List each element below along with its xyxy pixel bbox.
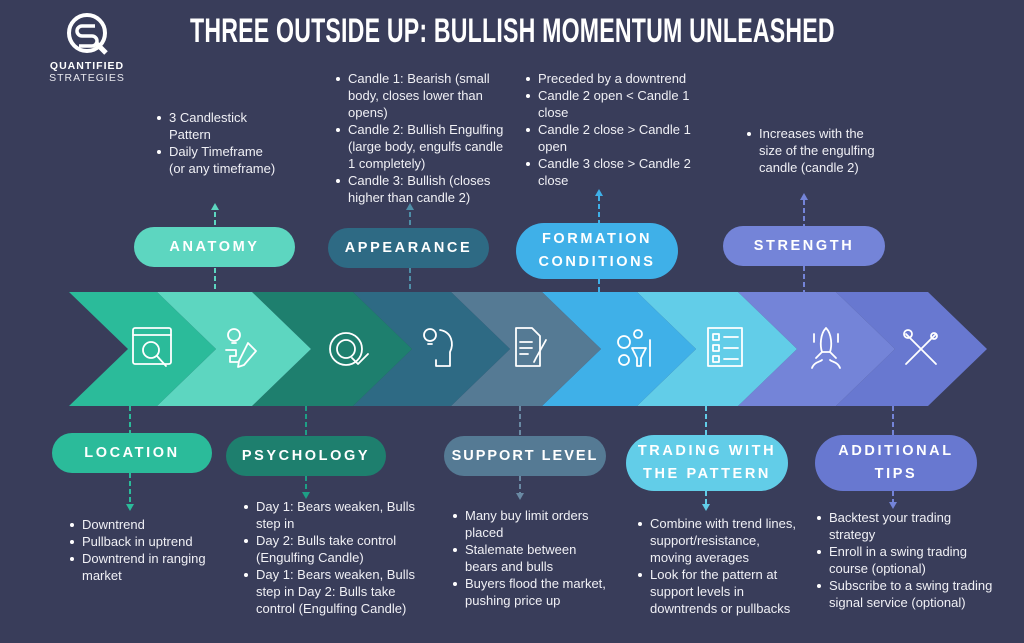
- text: appearance: [336, 71, 503, 205]
- text: support level: Buyers flood the market, pushing price up: [465, 576, 606, 608]
- pill: strength: [723, 226, 885, 266]
- logo: STRATEGIES: [49, 72, 125, 84]
- text: additional tips: Backtest your trading strategy: [829, 510, 951, 542]
- text: anatomy: [157, 110, 275, 176]
- text: strength: Increases with the size of the engulfing candle (candle 2): [759, 126, 875, 175]
- pill: additional tips: ADDITIONAL: [838, 443, 954, 459]
- text: additional tips: Subscribe to a swing trading signal service (optional): [829, 578, 992, 610]
- pill: anatomy: ANATOMY: [169, 238, 260, 254]
- text: trading with the pattern: Look for the pattern at support levels in downtrends or pullbacks: [650, 567, 790, 616]
- logo: QUANTIFIED: [50, 60, 124, 72]
- pill: psychology: PSYCHOLOGY: [242, 448, 370, 464]
- text: psychology: Day 2: Bulls take control (Engulfing Candle): [256, 533, 396, 565]
- title: THREE OUTSIDE UP: BULLISH MOMENTUM UNLEASHED: [190, 12, 835, 50]
- text: additional tips: Enroll in a swing trading course (optional): [829, 544, 967, 576]
- pill: support level: [444, 436, 606, 476]
- text: psychology: Day 1: Bears weaken, Bulls step in: [256, 499, 415, 531]
- text: psychology: Day 1: Bears weaken, Bulls step in Day 2: Bulls take control (Engulfing Candle): [256, 567, 415, 616]
- text: location: [70, 517, 206, 583]
- text: formation conditions: [526, 71, 691, 188]
- pill: anatomy: [134, 227, 295, 267]
- text: location: Downtrend in ranging market: [82, 551, 206, 583]
- logo: [49, 13, 125, 84]
- text: formation conditions: Candle 2 open < Candle 1 close: [538, 88, 689, 120]
- text: psychology: [244, 499, 415, 616]
- text: anatomy: 3 Candlestick Pattern: [169, 110, 247, 142]
- pill: support level: SUPPORT LEVEL: [452, 448, 598, 464]
- text: location: Pullback in uptrend: [82, 534, 193, 549]
- pill: trading with the pattern: TRADING WITH: [638, 443, 776, 459]
- text: support level: Stalemate between bears and bulls: [465, 542, 576, 574]
- text: appearance: Candle 3: Bullish (closes higher than candle 2): [348, 173, 490, 205]
- pill: formation conditions: CONDITIONS: [538, 254, 656, 270]
- pill: location: [52, 433, 212, 473]
- pill: additional tips: [815, 435, 977, 491]
- text: formation conditions: Preceded by a downtrend: [538, 71, 686, 86]
- text: anatomy: Daily Timeframe (or any timeframe): [169, 144, 275, 176]
- pill: location: LOCATION: [84, 444, 180, 460]
- pill: formation conditions: [516, 223, 678, 279]
- text: formation conditions: Candle 3 close > Candle 2 close: [538, 156, 691, 188]
- text: formation conditions: Candle 2 close > Candle 1 open: [538, 122, 691, 154]
- text: additional tips: [817, 510, 992, 610]
- pill: formation conditions: FORMATION: [542, 231, 652, 247]
- pill: appearance: APPEARANCE: [345, 240, 472, 256]
- text: trading with the pattern: Combine with trend lines, support/resistance, moving averages: [650, 516, 796, 565]
- text: trading with the pattern: [638, 516, 796, 616]
- pill: psychology: [226, 436, 386, 476]
- text: location: Downtrend: [82, 517, 145, 532]
- pill: appearance: [328, 228, 489, 268]
- text: appearance: Candle 2: Bullish Engulfing (large body, engulfs candle 1 completely): [348, 122, 503, 171]
- text: support level: [453, 508, 606, 608]
- text: appearance: Candle 1: Bearish (small body, closes lower than opens): [348, 71, 490, 120]
- pill: trading with the pattern: [626, 435, 788, 491]
- text: support level: Many buy limit orders placed: [465, 508, 589, 540]
- pill: trading with the pattern: THE PATTERN: [643, 466, 771, 482]
- pill: strength: STRENGTH: [754, 238, 854, 254]
- pill: additional tips: TIPS: [875, 466, 917, 482]
